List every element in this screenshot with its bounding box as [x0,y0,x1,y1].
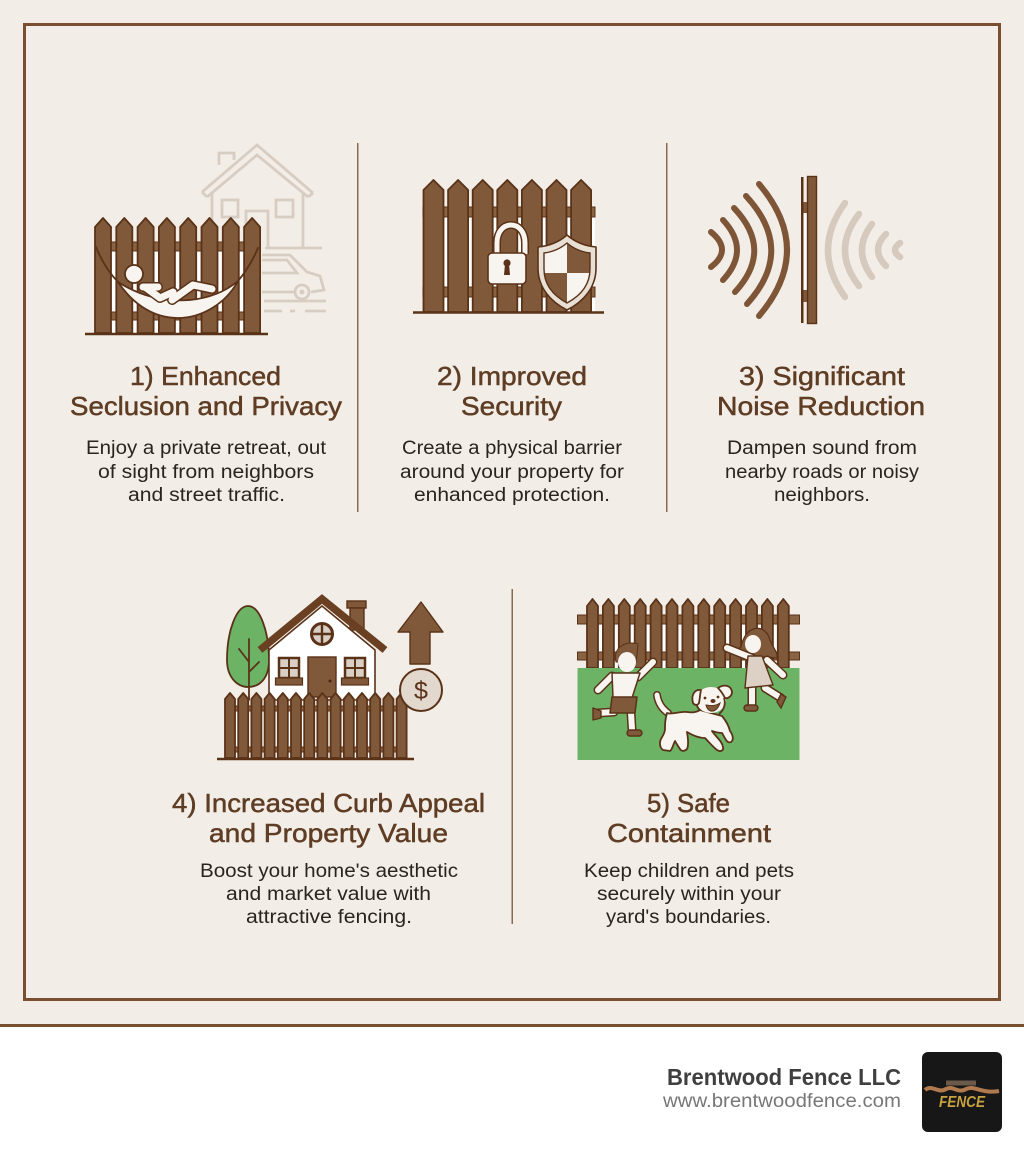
panel: seclusion and privacy [70,145,342,506]
heading [437,361,587,421]
girl playing [727,628,786,711]
boy running [593,643,653,736]
description: Keep children and pets [584,861,794,882]
icon: children and dog in fenced yard [578,599,800,760]
reduced sound waves [828,203,900,297]
description: enhanced protection. [414,485,610,506]
heading: Noise Reduction [717,391,925,421]
hammock with resting person [96,247,258,318]
heading [717,361,925,421]
description: Enjoy a private retreat, out [86,438,327,459]
description [725,438,920,506]
heading: 1) Enhanced [130,361,281,391]
heading: Security [461,391,562,421]
fence [578,599,800,668]
padlock [488,225,526,284]
panel: noise reduction [711,176,925,506]
panel: improved security [400,180,625,506]
description: neighbors. [774,485,870,506]
description: securely within your [597,884,782,905]
icon: dollar coin: $ [414,677,428,705]
description: Create a physical barrier [402,438,623,459]
heading: 2) Improved [437,361,587,391]
fence pickets [85,218,268,334]
description: Boost your home's aesthetic [200,861,458,882]
arrow up [398,602,443,664]
description: nearby roads or noisy [725,462,920,483]
icon: dollar coin [400,669,442,711]
icon: fence with padlock and shield [413,180,604,312]
heading [607,788,772,848]
heading: 5) Safe [647,788,730,818]
heading [172,788,485,848]
heading [70,361,342,421]
description: and street traffic. [128,485,285,506]
icon: sound waves blocked by fence [711,176,900,324]
tree [227,606,269,700]
description [86,438,327,506]
panel: safe containment [578,599,800,928]
footer [0,1024,1024,1154]
house [260,599,385,700]
fence pickets [413,180,604,312]
heading: 4) Increased Curb Appeal [172,788,485,818]
description: of sight from neighbors [98,462,314,483]
description [584,861,794,928]
description: attractive fencing. [246,907,412,928]
logo [922,1052,1002,1132]
faded house and car [202,145,326,311]
logo: FENCE [939,1094,986,1111]
heading: and Property Value [209,818,448,848]
panel: curb appeal and property value [172,599,485,928]
description [400,438,625,506]
heading: 3) Significant [739,361,906,391]
description: around your property for [400,462,625,483]
fence cross-section [801,176,816,324]
icon: fence with hammock and faded house [85,145,326,334]
fence pickets [217,693,414,759]
shield [538,235,596,310]
dog [657,686,733,751]
description: yard's boundaries. [606,907,771,928]
heading: Seclusion and Privacy [70,391,342,421]
description: and market value with [226,884,431,905]
lawn [578,668,800,760]
description [200,861,458,928]
description: Dampen sound from [727,438,917,459]
incoming sound waves [711,184,787,316]
heading: Containment [607,818,772,848]
website: www.brentwoodfence.com [662,1090,901,1112]
icon: house, tree, fence, rising value [217,599,443,759]
company name: Brentwood Fence LLC [667,1064,901,1090]
